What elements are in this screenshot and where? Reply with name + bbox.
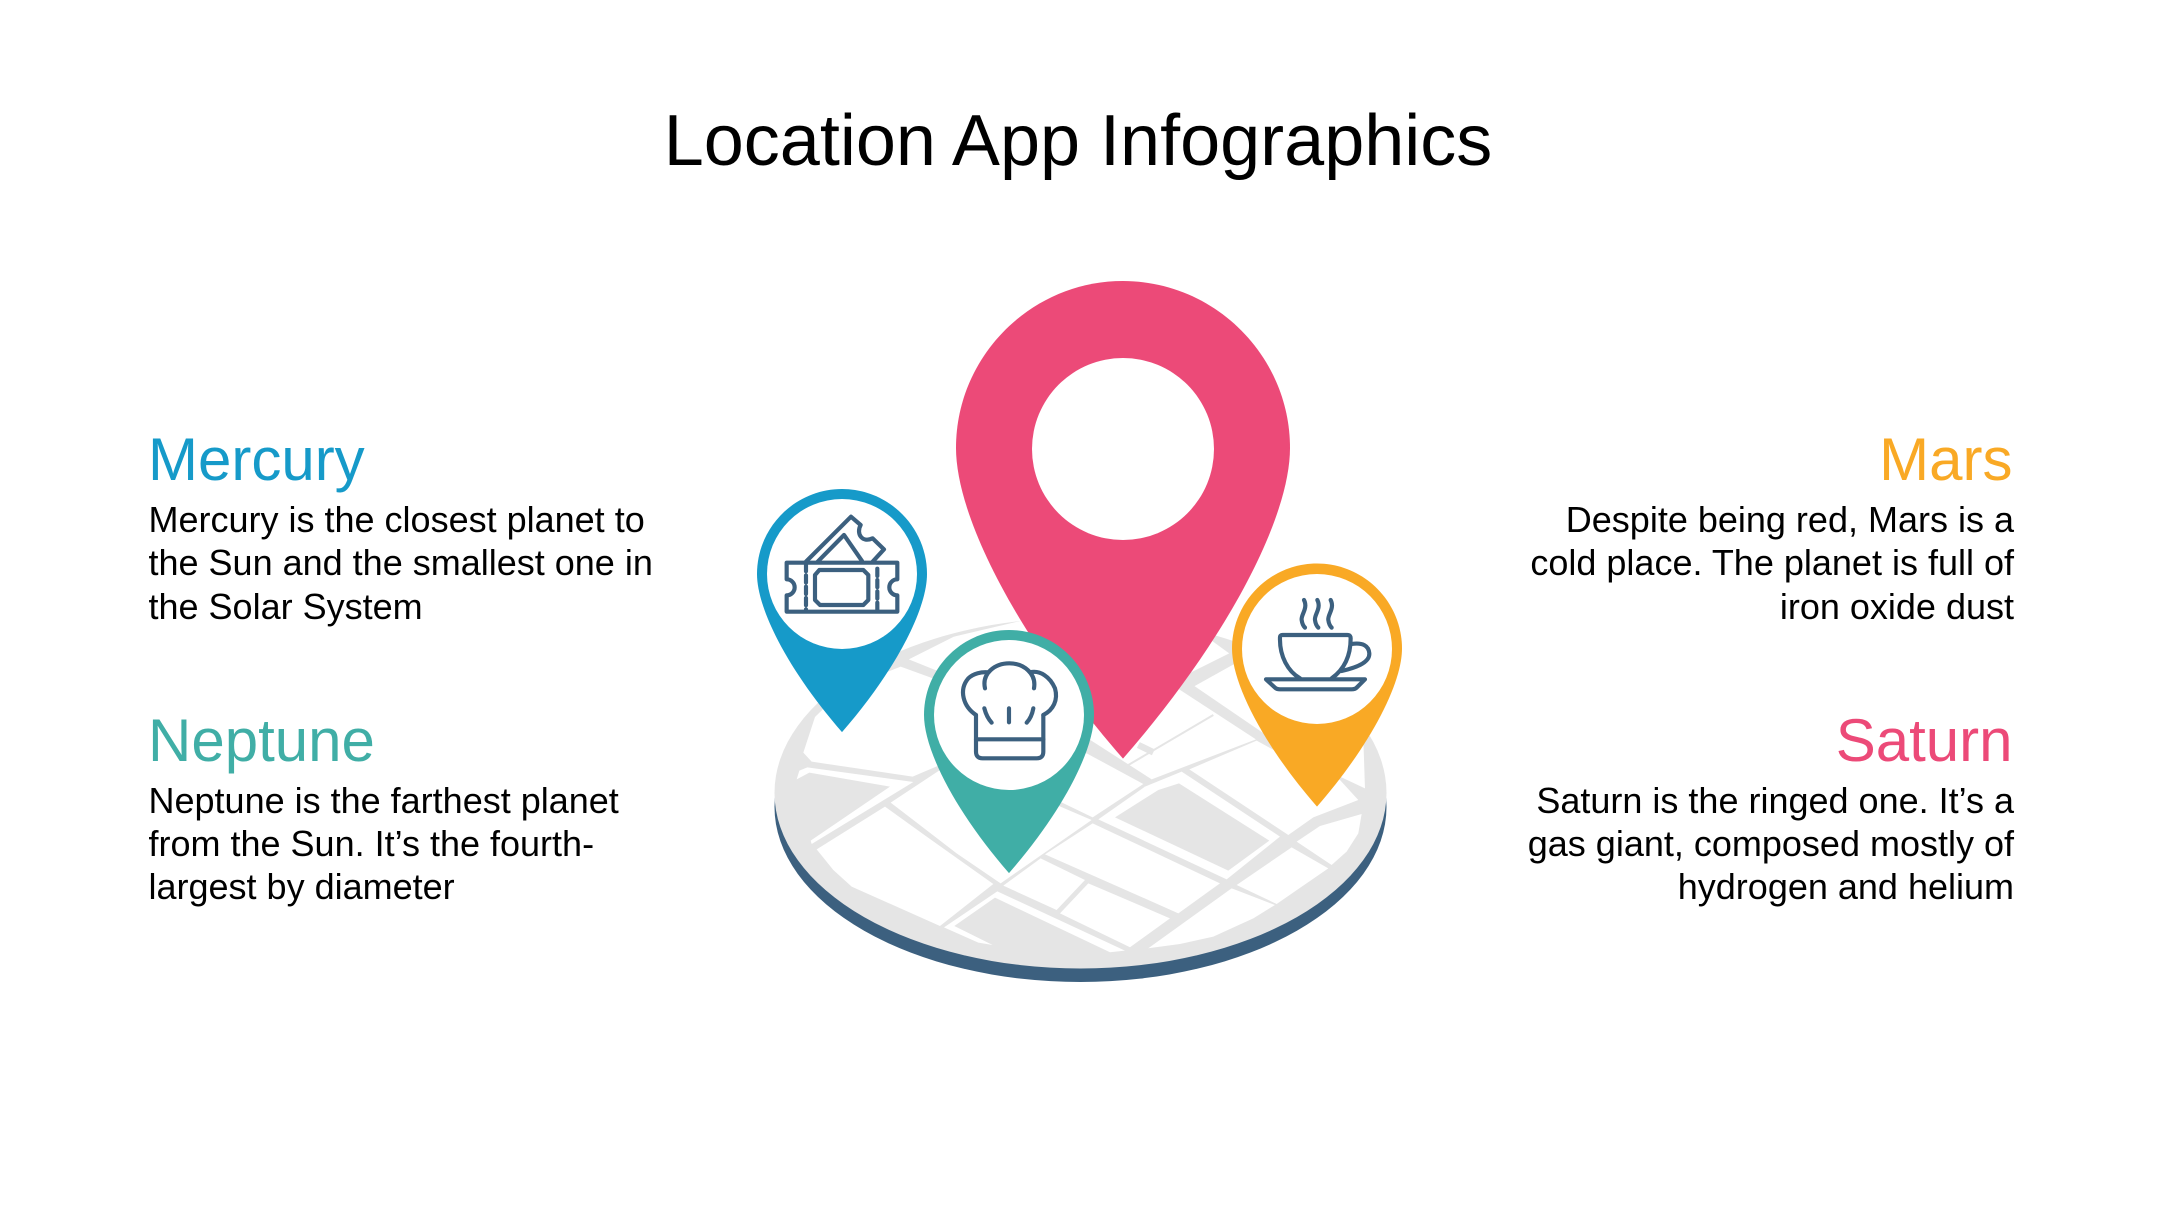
- icon: blue pin with tickets: [757, 489, 927, 732]
- text block: Mercury description: [148, 499, 653, 627]
- text block: Neptune description: [148, 780, 619, 907]
- panel: Mercury: [148, 426, 653, 627]
- panel: Neptune: [148, 707, 619, 907]
- text block: Neptune description: largest by diameter: [148, 866, 455, 907]
- text block: Saturn description: gas giant, composed mostly of: [1528, 823, 2015, 864]
- panel: Saturn: [1528, 707, 2015, 907]
- icon: orange pin with coffee cup: [1232, 564, 1402, 807]
- text block: Mars description: cold place. The planet is full of: [1530, 542, 2015, 583]
- text block: Neptune description: from the Sun. It’s the fourth-: [148, 823, 594, 864]
- icon: large pink location pin: [956, 281, 1290, 759]
- illustration: isometric city map disc: [774, 618, 1386, 982]
- icon: teal pin with chef hat: [924, 630, 1094, 873]
- title: Location App Infographics: [664, 101, 1492, 181]
- heading: Saturn: Saturn: [1836, 707, 2012, 774]
- heading: Neptune: Neptune: [148, 707, 375, 774]
- text block: Mars description: iron oxide dust: [1780, 586, 2014, 627]
- text block: Neptune description: Neptune is the farthest planet: [148, 780, 619, 821]
- text block: Saturn description: Saturn is the ringed one. It’s a: [1536, 780, 2015, 821]
- heading: Mercury: Mercury: [148, 426, 365, 493]
- text block: Saturn description: hydrogen and helium: [1678, 866, 2014, 907]
- text block: Mercury description: the Sun and the smallest one in: [148, 542, 653, 583]
- text block: Mars description: [1530, 499, 2015, 627]
- panel: Mars: [1530, 426, 2015, 627]
- text block: Mars description: Despite being red, Mars is a: [1566, 499, 2015, 540]
- text block: Mercury description: the Solar System: [148, 586, 423, 627]
- text block: Mercury description: Mercury is the closest planet to: [148, 499, 645, 540]
- heading: Mars: Mars: [1879, 426, 2012, 493]
- text block: Saturn description: [1528, 780, 2015, 907]
